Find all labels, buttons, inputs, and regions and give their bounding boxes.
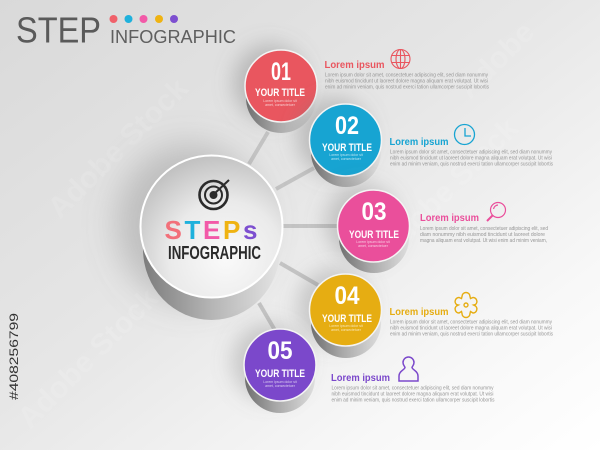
body [325,72,489,90]
connector lines [249,132,338,332]
stock id: #408256799 [9,313,21,400]
caption: amet, consectetuer [331,328,362,332]
body [390,150,553,168]
number: 01 [271,58,291,86]
caption [329,324,363,332]
heading: Lorem ipsum [390,307,449,318]
caption: Lorem ipsum dolor sit [263,99,297,103]
body: nibh euismod tincidunt ut laoreet dolore magna aliquam erat volutpat. Ut wisi [325,78,488,84]
body: diam nonummy nibh euismod tincidunt ut laoreet dolore [420,232,545,238]
caption: Lorem ipsum dolor sit [263,380,297,384]
label: YOUR TITLE [255,87,305,99]
shadow [297,268,371,346]
caption [356,240,390,248]
title colour dots [110,15,178,23]
shadow [297,98,371,176]
icon: globe [391,50,410,68]
heading: Lorem ipsum [324,60,385,71]
cylinder [311,312,381,358]
number: 05 [268,337,293,365]
icon: target [200,180,229,209]
body: Lorem ipsum dolor sit amet, consectetuer adipiscing elit, sed diam nonummy [332,386,494,392]
disc [244,329,316,401]
step 01 [233,44,317,133]
body: enim ad minim veniam, quis nostrud exerci tation ullamcorper suscipit lobortis [332,398,495,404]
number: 03 [362,198,386,226]
hub shadow [116,144,264,304]
label: YOUR TITLE [322,313,372,325]
central hub [116,144,282,320]
shadow [233,44,307,122]
body [332,386,495,404]
caption: amet, consectetuer [265,103,296,107]
icon: clock [454,124,474,144]
body [390,320,553,338]
heading: Lorem ipsum [420,213,479,224]
icon: gear flower [455,292,477,318]
shadow [232,323,306,401]
body: enim ad minim veniam, quis nostrud exerci tation ullamcorper suscipit lobortis [325,84,489,90]
cylinder [311,142,381,187]
cylinder [246,88,316,133]
body: magna aliquam erat volutpat. Ut wisi enim ad minim veniam, [420,238,547,244]
disc [310,104,382,176]
title: INFOGRAPHIC: INFOGRAPHIC [110,26,236,47]
cylinder [339,228,409,273]
title [16,10,236,50]
cylinder [245,367,315,413]
hub top [140,156,282,298]
stock watermark: Adobe Stock [372,112,525,265]
title: STEP: STEP [16,10,101,50]
hub cylinder [143,226,280,320]
body: enim ad minim veniam, quis nostrud exerci tation ullamcorper suscipit lobortis [390,332,553,338]
icon: magnifier [487,202,506,221]
step 05 [232,323,316,413]
label: YOUR TITLE [349,229,399,241]
step 03 [325,184,410,273]
body: nibh euismod tincidunt ut laoreet dolore magna aliquam erat volutpat. Ut wisi [390,156,552,162]
text block 04 [390,292,553,338]
disc [338,190,410,262]
number: 02 [335,112,359,140]
body: enim ad minim veniam, quis nostrud exerci tation ullamcorper suscipit lobortis [390,162,553,168]
body: Lorem ipsum dolor sit amet, consectetuer adipiscing elit, sed diam nonummy [390,320,552,326]
label: YOUR TITLE [255,368,305,380]
hub heading: STEPs: STEPs [164,215,258,245]
text block 03 [420,202,548,244]
caption: Lorem ipsum dolor sit [329,153,363,157]
heading: Lorem ipsum [390,137,449,148]
caption [263,99,297,107]
label: YOUR TITLE [322,142,372,154]
stock watermark: Adobe Stock [12,282,165,435]
body: Lorem ipsum dolor sit amet, consectetuer adipiscing elit, sed diam nonummy [325,72,488,78]
body: Lorem ipsum dolor sit amet, consectetuer adipiscing elit, sed diam nonummy [390,150,552,156]
caption: Lorem ipsum dolor sit [329,324,363,328]
heading: Lorem ipsum [331,373,390,384]
disc [245,50,317,122]
text block 02 [390,124,553,168]
caption: amet, consectetuer [265,384,296,388]
body: nibh euismod tincidunt ut laoreet dolore magna aliquam erat volutpat. Ut wisi [332,392,494,398]
caption: amet, consectetuer [331,157,362,161]
body: nibh euismod tincidunt ut laoreet dolore magna aliquam erat volutpat. Ut wisi [390,326,552,332]
caption [263,380,297,388]
stock watermark: Adobe Stock [42,72,195,225]
hub subheading: INFOGRAPHIC [168,243,261,263]
number: 04 [334,282,360,310]
disc [310,274,382,346]
shadow [325,184,399,262]
icon: person [399,357,418,381]
text block 01 [324,50,489,90]
body: Lorem ipsum dolor sit amet, consectetuer adipiscing elit, sed [420,226,548,232]
caption [329,153,363,161]
text block 05 [331,357,495,404]
body [420,226,548,244]
caption: Lorem ipsum dolor sit [356,240,390,244]
caption: amet, consectetuer [358,244,389,248]
step 02 [297,98,382,187]
stock watermark: Adobe [452,16,541,105]
step 04 [297,268,382,358]
